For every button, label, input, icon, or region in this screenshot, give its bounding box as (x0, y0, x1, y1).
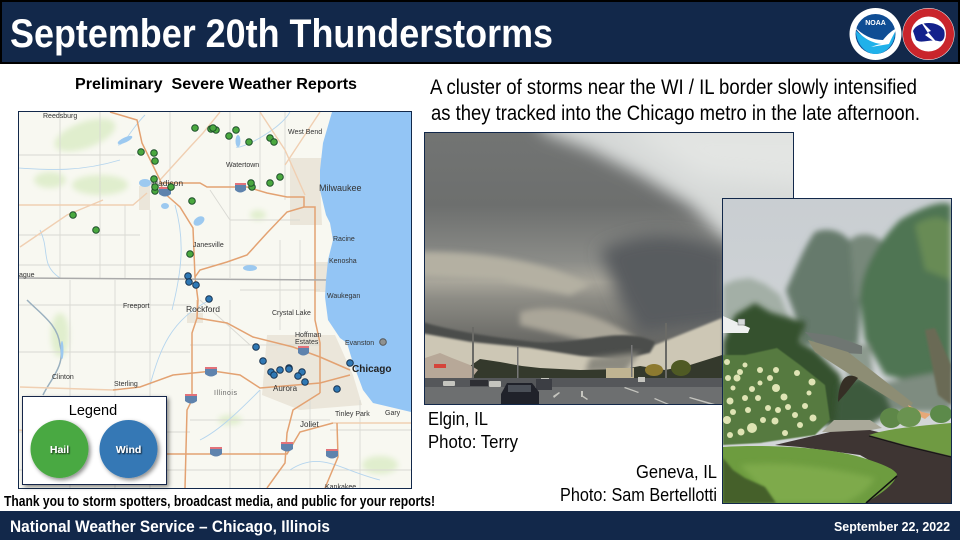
bright sky upper right (532, 133, 793, 246)
map heading: Preliminary Severe Weather Reports (75, 76, 357, 93)
city labels: Illinois (214, 390, 237, 397)
city labels: Tinley Park (335, 411, 370, 418)
icon: NOAA logo (850, 8, 902, 60)
photo: Geneva downed tree (722, 198, 952, 504)
city labels: Hoffman (295, 332, 321, 339)
right lawn (869, 423, 951, 456)
icon: NOAA logo: NOAA (865, 20, 886, 27)
icon: National Weather Service logo (902, 8, 954, 60)
tan band left (410, 252, 590, 295)
city labels: Watertown (226, 162, 259, 169)
city labels: Joliet (300, 420, 319, 429)
city labels: Janesville (193, 242, 224, 249)
description text (430, 76, 920, 125)
minor roads (19, 112, 411, 488)
caption: Geneva photo: Photo: Sam Bertellotti (560, 485, 717, 505)
rivers (19, 112, 380, 480)
city labels: Waukegan (327, 293, 360, 300)
thank you note: Thank you to storm spotters, broadcast media, and public for your reports! (4, 494, 435, 510)
peach highways (19, 112, 411, 435)
city labels: Aurora (273, 384, 298, 393)
panel: storm report map (18, 112, 412, 491)
hail reports (70, 125, 283, 257)
black SUV (501, 383, 539, 404)
distant trees and buildings (470, 355, 722, 378)
city labels: Freeport (123, 303, 150, 310)
parked cars (470, 380, 488, 386)
footer: date: September 22, 2022 (834, 520, 950, 534)
city labels: Racine (333, 236, 355, 243)
distant trees (723, 203, 951, 412)
title: September 20th Thunderstorms (10, 12, 553, 56)
caption: Elgin photo (428, 409, 518, 452)
parking lot (425, 387, 722, 404)
city labels: Crystal Lake (272, 310, 311, 317)
footer bar (0, 511, 960, 540)
hedges (880, 408, 902, 428)
legend: wind (100, 420, 158, 478)
city labels: Clinton (52, 374, 74, 381)
city labels: Kenosha (329, 258, 357, 265)
Lake Michigan (320, 112, 411, 412)
fallen canopy (723, 303, 850, 425)
city labels (19, 113, 401, 491)
legend: hail (30, 420, 88, 478)
dark anvil right (600, 235, 730, 335)
city labels: Madison (151, 178, 183, 188)
trunk (808, 340, 913, 410)
city labels: Evanston (345, 340, 374, 347)
city labels: Sterling (114, 381, 138, 388)
lower sky (425, 317, 722, 370)
hydrangea bush (723, 348, 830, 445)
city labels: Chicago (352, 364, 391, 375)
house roof (805, 332, 862, 354)
legend (22, 396, 166, 484)
photo: Elgin shelf cloud (424, 132, 794, 405)
city labels: Reedsburg (43, 113, 77, 120)
gravel (822, 420, 882, 432)
legend: Legend (69, 403, 117, 419)
legend: wind: Wind (116, 444, 141, 456)
caption: Elgin photo: Elgin, IL (428, 409, 488, 429)
city labels: Estates (295, 339, 319, 346)
front lawn (723, 446, 897, 503)
footer: organisation: National Weather Service – Chicago, Illinois (10, 517, 330, 536)
legend: hail: Hail (50, 444, 69, 456)
city labels: Kankakee (325, 484, 356, 491)
highway shields (159, 183, 338, 458)
shelf dark base (425, 322, 655, 358)
light poles (472, 327, 474, 378)
wind reports (185, 273, 353, 392)
city labels: Rockford (186, 304, 220, 314)
city labels: Milwaukee (319, 183, 362, 193)
caption: Elgin photo: Photo: Terry (428, 432, 518, 452)
other report (380, 339, 386, 345)
white house (723, 316, 750, 333)
shelf lobes (518, 306, 636, 340)
caption: Geneva photo (560, 462, 717, 505)
city labels: Gary (385, 410, 401, 417)
city labels: ague (19, 272, 35, 279)
header banner (0, 0, 960, 64)
city labels: West Bend (288, 129, 322, 136)
green terrain patches (34, 112, 398, 474)
small lakes (60, 134, 257, 359)
mulch path (775, 430, 951, 503)
state line (19, 278, 332, 280)
urban areas (139, 158, 362, 410)
caption: Geneva photo: Geneva, IL (636, 462, 717, 482)
